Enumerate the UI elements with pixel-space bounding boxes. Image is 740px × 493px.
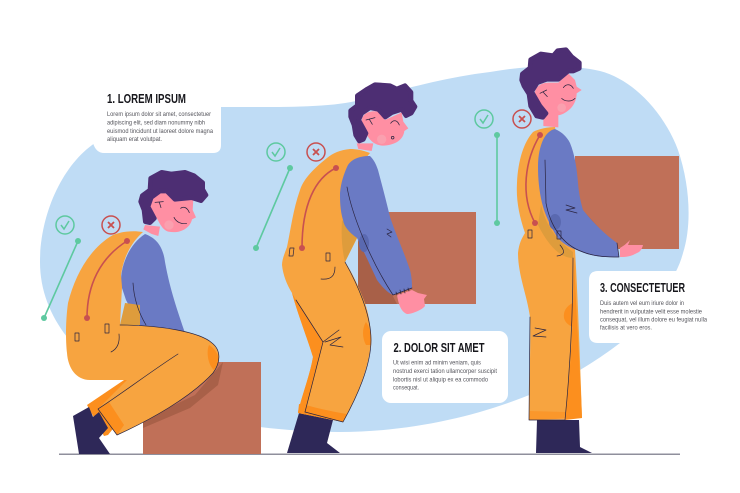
callout 2 bbox=[382, 331, 508, 403]
box 1 bbox=[143, 362, 261, 454]
box 2 bbox=[358, 212, 476, 304]
callout 2: 2. DOLOR SIT AMET bbox=[394, 340, 485, 355]
figure 3: standing bbox=[517, 50, 643, 453]
callout 1: adipiscing elit, sed diam nonummy nibh bbox=[107, 120, 205, 126]
callout 3: hendrerit in vulputate velit esse molestie bbox=[600, 308, 702, 316]
callout 3 bbox=[589, 271, 715, 343]
background blob bbox=[40, 66, 689, 432]
head 2 bbox=[351, 85, 415, 151]
posture markers 1 bbox=[41, 216, 130, 321]
callout 3: consequat, vel illum dolore eu feugiat nulla bbox=[600, 316, 707, 324]
head 1 bbox=[141, 172, 206, 236]
callout 3: 3. CONSECTETUER bbox=[600, 280, 685, 295]
callout 1: 1. LOREM IPSUM bbox=[107, 91, 186, 106]
callout 1: aliquam erat volutpat. bbox=[107, 136, 162, 143]
callout 1: euismod tincidunt ut laoreet dolore magna bbox=[107, 128, 213, 135]
callout 1: Lorem ipsum dolor sit amet, consectetuer bbox=[107, 111, 212, 118]
callout 1 bbox=[93, 85, 221, 153]
figure 1: squatting bbox=[66, 172, 223, 454]
callout 2: consequat. bbox=[393, 384, 419, 392]
posture markers 3 bbox=[475, 110, 543, 226]
posture markers 2 bbox=[253, 143, 339, 251]
head 3 bbox=[522, 50, 582, 127]
callout 2: lobortis nisl ut aliquip ex ea commodo bbox=[393, 376, 488, 384]
callout 2: Ut wisi enim ad minim veniam, quis bbox=[393, 360, 481, 366]
ground line bbox=[59, 454, 680, 455]
callout 2: nostrud exerci tation ullamcorper suscipit bbox=[393, 368, 497, 375]
box 3 bbox=[575, 156, 679, 249]
figure 2: bending bbox=[282, 85, 427, 453]
callout 3: facilisis at vero eros. bbox=[600, 324, 652, 332]
callout 3: Duis autem vel eum iriure dolor in bbox=[600, 300, 684, 307]
